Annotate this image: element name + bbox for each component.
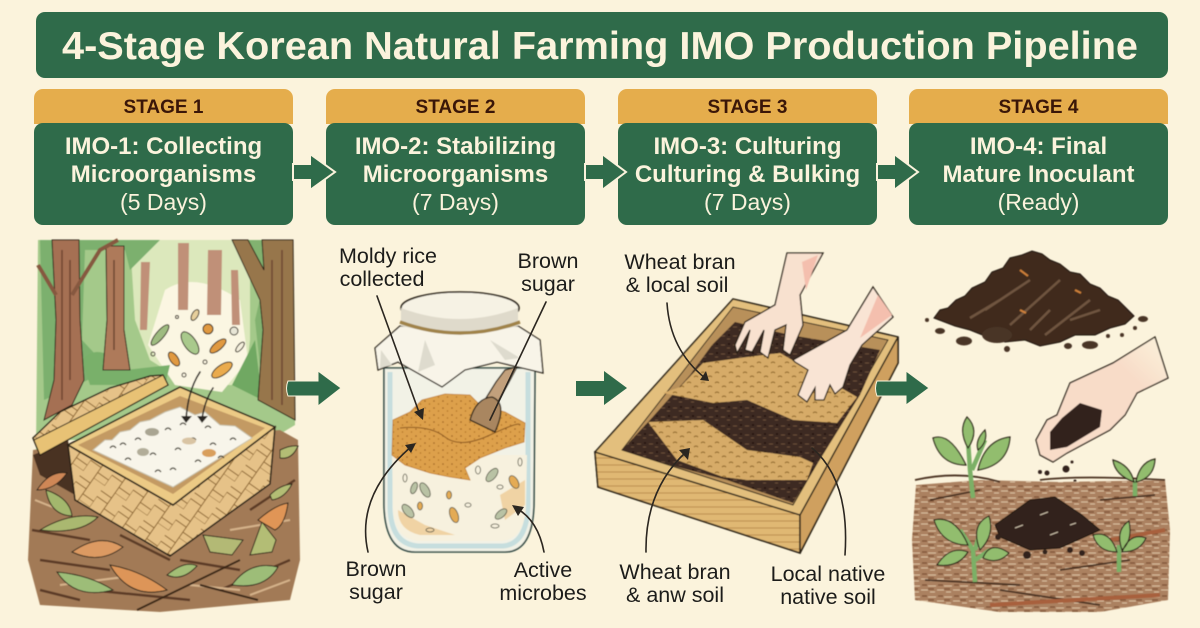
label: wheat bran and local soil [624,250,736,381]
stage 3 card: IMO-3: Culturing [654,133,841,160]
microbes [149,322,171,348]
label: brown sugar top: Brown [518,249,578,273]
falling arrows [186,372,213,420]
label: brown sugar bottom: sugar [349,580,403,604]
label: active microbes: microbes [499,581,587,605]
basket lid [33,375,168,455]
shadow under lid [33,440,75,495]
brown sugar layer [392,394,525,480]
stage 4 card: STAGE 4 [999,97,1079,118]
stage 3 card: (7 Days) [704,189,791,215]
arrow: image 3 to 4 [876,371,929,405]
arrow: stage 2 to 3 [585,154,626,190]
forest floor [28,430,300,612]
basket body [68,427,275,556]
soil pile [934,251,1134,346]
title: 4-Stage Korean Natural Farming IMO Production Pipeline [62,25,1138,68]
label: brown sugar bottom [346,443,416,604]
illustration: fermentation jar [339,244,587,605]
stage 2 card [326,89,585,225]
label: wheat bran and anw soil [619,448,731,607]
label: wheat bran and local soil: Wheat bran [624,250,736,274]
ground [912,480,1170,612]
label: active microbes [499,505,587,605]
stage 1 card: (5 Days) [120,189,207,215]
rice [93,407,252,487]
seedling bottom left [960,525,990,582]
label: brown sugar bottom: Brown [346,557,406,581]
stage 2 card: STAGE 2 [416,97,495,118]
falling soil [1038,460,1083,499]
stage 2 card: Microorganisms [363,161,548,188]
main trunks [44,240,84,420]
seedling top right [1133,480,1137,496]
stage 4 card: IMO-4: Final [970,133,1107,160]
label: local native soil [771,448,885,609]
label: wheat bran and anw soil: & anw soil [626,583,724,607]
label: local native soil: native soil [780,585,876,609]
arrow: stage 1 to 2 [293,154,335,190]
stage 2 card: (7 Days) [412,189,499,215]
seedling top left [968,440,985,498]
stage 1 card: Microorganisms [71,161,256,188]
label: moldy rice collected: Moldy rice [339,244,437,268]
stage 1 card: STAGE 1 [124,97,204,118]
stage 4 card: Mature Inoculant [942,161,1135,188]
stage 1 card: IMO-1: Collecting [65,133,262,160]
contents: rice and microbes [392,455,527,541]
wooden scoop [486,367,517,402]
jar body [384,368,535,552]
title [36,12,1168,78]
illustration: mature soil, hand and seedlings [912,251,1170,612]
label: wheat bran and local soil: & local soil [626,273,728,297]
jar artwork [375,292,543,552]
label: moldy rice collected [339,244,437,420]
small soil mound [995,497,1100,550]
label: active microbes: Active [514,558,572,582]
dark soil [622,322,880,503]
tray artwork [595,253,898,553]
tray [595,299,898,553]
stage 4 card [909,89,1168,225]
hands [735,253,823,358]
stage 2 card: IMO-2: Stabilizing [355,133,556,160]
label: wheat bran and anw soil: Wheat bran [619,560,731,584]
arrow: image 1 to 2 [286,371,341,406]
fallen leaves [37,473,67,490]
bran patches [663,353,857,423]
cloth and lid [375,326,543,387]
stage 1 card [34,89,293,225]
stage 3 card [618,89,877,225]
stage 3 card: Culturing & Bulking [635,161,860,188]
illustration: wooden tray with hands [595,250,898,609]
handful of soil [1050,403,1102,450]
arrow: image 2 to 3 [576,371,627,405]
stage 4 card: (Ready) [998,189,1079,215]
illustration: forest and bamboo basket of rice [28,240,300,612]
label: brown sugar top [490,249,578,420]
label: brown sugar top: sugar [521,272,575,296]
hand [1036,337,1168,462]
label: moldy rice collected: collected [340,267,424,291]
forest backdrop [36,240,295,450]
arrow: stage 3 to 4 [877,154,918,190]
label: local native soil: Local native [771,562,885,586]
stage 3 card: STAGE 3 [708,97,787,118]
back trunks [140,243,240,330]
seedling bottom right [1117,545,1121,572]
